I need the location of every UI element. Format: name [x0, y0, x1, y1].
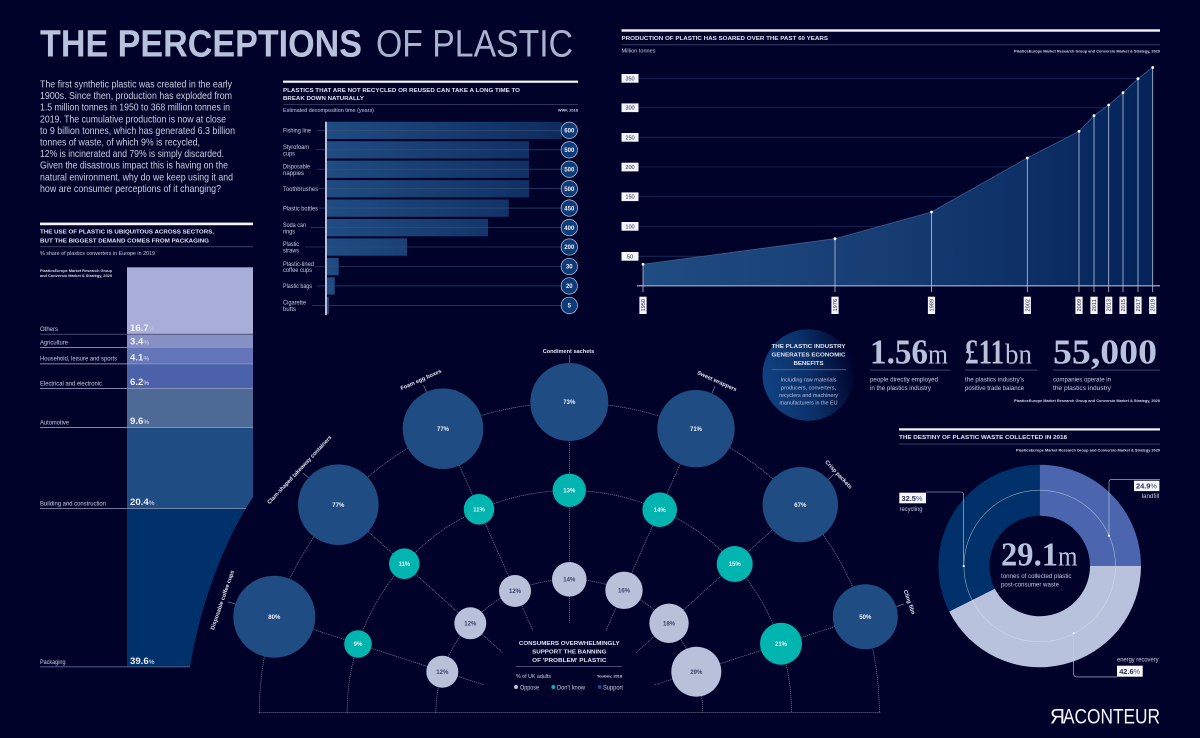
- sector values: 9.6%: [130, 416, 149, 427]
- heading: sectors: [40, 230, 214, 244]
- bubble values: support: [268, 400, 872, 621]
- item labels: coffee cups: [283, 267, 312, 274]
- logo: Raconteur: R: [1050, 705, 1065, 728]
- concentric arcs and spokes: [259, 402, 879, 713]
- stat: companies: [1053, 332, 1160, 392]
- y axis labels: 50: [627, 254, 633, 260]
- item labels: Disposable coffee cups: [210, 570, 236, 631]
- item labels: [210, 349, 916, 631]
- bubble values: don't know: 15%: [729, 562, 741, 568]
- legend: Don't know: [557, 684, 585, 691]
- heading: economic benefits: [772, 344, 846, 367]
- source: economic stats: PlasticsEurope Market Research Group and Conversio Market & Strategy, 2020: [1014, 398, 1160, 403]
- item labels: Soda can: [283, 222, 306, 229]
- stat: companies: companies operate in: [1053, 376, 1111, 384]
- axis: [325, 122, 327, 315]
- bars: [327, 122, 562, 314]
- stat: trade balance: £11: [965, 332, 1004, 372]
- logo: Raconteur: ACONTEUR: [1063, 705, 1160, 728]
- subtitle: consumers: % of UK adults: [516, 674, 551, 680]
- donut centre text: m: [1058, 542, 1078, 572]
- callout: landfill: [1108, 479, 1160, 537]
- donut centre text: post-consumer waste: [1001, 581, 1059, 588]
- legend: Oppose: [520, 684, 539, 691]
- bubble values: oppose: 12%: [464, 622, 477, 628]
- item labels: Plastic-lined: [283, 261, 314, 268]
- callout: recycling: 32.5%: [902, 494, 923, 503]
- item labels: Plastic bags: [283, 283, 312, 290]
- bubble values: oppose: 12%: [509, 589, 522, 595]
- data points: [642, 66, 1154, 266]
- callout: energy recovery: [1073, 632, 1159, 677]
- item labels: Fishing line: [283, 128, 311, 134]
- heading: economic benefits: BENEFITS: [794, 361, 824, 367]
- body: economic benefits: producers, converters,: [781, 385, 837, 391]
- item labels: Plastic bottles: [283, 205, 318, 212]
- item labels: cups: [283, 151, 295, 158]
- heading: economic benefits: THE PLASTIC INDUSTRY: [772, 344, 846, 350]
- item labels: Styrofoam: [283, 144, 309, 151]
- donut centre text: tonnes of collected plastic: [1001, 573, 1072, 580]
- heading: consumers: OF 'PROBLEM' PLASTIC: [532, 658, 607, 664]
- sector values: 3.4%: [130, 336, 149, 348]
- values: 200: [564, 245, 575, 251]
- title: [40, 24, 573, 66]
- stat: companies: the plastics industry: [1053, 385, 1112, 392]
- stacked bar segments: [127, 267, 253, 667]
- area: [643, 68, 1153, 286]
- bubble values: support: 77%: [332, 503, 345, 509]
- item labels: [283, 128, 318, 313]
- stat: trade balance: positive trade balance: [965, 385, 1024, 392]
- y axis labels: [622, 74, 638, 261]
- source: decomposition: WWF, 2018: [558, 108, 579, 113]
- item label ticks: [228, 355, 904, 607]
- bubble values: support: 77%: [437, 427, 450, 433]
- bubble values: don't know: 13%: [563, 488, 576, 494]
- stat: people employed: people directly employed: [870, 376, 938, 384]
- bubble values: oppose: 14%: [563, 578, 576, 584]
- subtitle: sectors: % share of plastics converters in Europe in 2019: [40, 251, 155, 257]
- sector labels: Building and construction: [40, 500, 106, 508]
- item labels: Disposable: [283, 164, 310, 171]
- item labels: butts: [283, 306, 296, 313]
- values: [564, 128, 575, 310]
- legend: Support: [603, 684, 623, 691]
- item labels: Toothbrushes: [283, 186, 318, 193]
- item labels: Cling film: [902, 589, 916, 615]
- source: consumers: YouGov, 2018: [597, 674, 623, 679]
- donut centre text: 29.1: [1001, 536, 1058, 574]
- values: 5: [568, 304, 572, 310]
- area outline: [643, 68, 1153, 264]
- panel: economic benefits circle: [762, 329, 854, 421]
- y axis labels: 350: [625, 76, 635, 82]
- panel: waste destiny donut: [899, 428, 1160, 677]
- panel: production area chart: [622, 29, 1160, 314]
- title: THE PERCEPTIONS: [40, 24, 362, 66]
- sector values: 39.6%: [130, 656, 155, 667]
- stat: people employed: m: [928, 338, 948, 370]
- heading: sectors: THE USE OF PLASTIC IS UBIQUITOUS ACROSS SECTORS,: [40, 230, 214, 236]
- callout: landfill: 24.9%: [1136, 482, 1157, 491]
- intro text: to 9 billion tonnes, which has generated 6.3 billion: [40, 126, 235, 137]
- panel: sectors stacked bar: [40, 223, 253, 667]
- source: sectors: and Conversio Market & Strategy, 2020: [40, 273, 112, 278]
- heading: consumers: [519, 641, 620, 664]
- heading: destiny: THE DESTINY OF PLASTIC WASTE COLLECTED IN 2018: [899, 435, 1068, 441]
- subtitle: production: Million tonnes: [622, 49, 656, 55]
- stat: people employed: in the plastics industry: [870, 385, 932, 392]
- intro text: tonnes of waste, of which 9% is recycled,: [40, 138, 200, 148]
- bubble values: oppose: [436, 578, 703, 676]
- sector values: 16.7%: [130, 323, 155, 334]
- source: production: PlasticsEurope Market Research Group and Conversio Market & Strategy, 2020: [1014, 48, 1160, 53]
- year labels: [639, 297, 1157, 314]
- intro text: [40, 80, 235, 195]
- sector labels: Automotive: [40, 420, 69, 426]
- intro text: 1900s. Since then, production has exploded from: [40, 91, 232, 102]
- panel: consumer support bubble chart: [210, 349, 916, 713]
- callout: recycling: [899, 492, 965, 567]
- base line: [258, 712, 881, 714]
- heading: sectors: BUT THE BIGGEST DEMAND COMES FROM PACKAGING: [40, 238, 209, 244]
- heading: production: PRODUCTION OF PLASTIC HAS SOARED OVER THE PAST 60 YEARS: [622, 36, 828, 42]
- intro text: how are consumer perceptions of it changing?: [40, 184, 221, 195]
- sector values: 6.2%: [130, 377, 149, 388]
- heading: decomposition: PLASTICS THAT ARE NOT RECYCLED OR REUSED CAN TAKE A LONG TIME TO: [283, 88, 520, 94]
- callout: energy recovery: energy recovery: [1117, 656, 1159, 663]
- row guide lines: [305, 130, 561, 305]
- body: economic benefits: manufacturers in the EU: [780, 400, 838, 406]
- heading: decomposition: BREAK DOWN NATURALLY: [283, 96, 364, 102]
- heading: decomposition: [283, 88, 520, 102]
- callout: energy recovery: 42.6%: [1119, 667, 1141, 676]
- donut chart: [938, 465, 1141, 667]
- y axis labels: 150: [625, 195, 635, 201]
- item labels: Crisp packets: [823, 460, 853, 490]
- stat: people employed: [870, 332, 950, 392]
- values: 30: [566, 265, 573, 271]
- stat: trade balance: the plastics industry's: [965, 376, 1025, 384]
- title: OF PLASTIC: [376, 24, 573, 66]
- sector divider lines: [40, 334, 253, 667]
- oppose bubbles: [426, 562, 721, 697]
- sector labels: Agriculture: [40, 340, 68, 346]
- year labels: 2013: [1107, 299, 1113, 312]
- intro text: 12% is incinerated and 79% is simply discarded.: [40, 149, 224, 160]
- sector labels: Electrical and electronic: [40, 380, 103, 388]
- callout: recycling: recycling: [900, 506, 923, 513]
- y axis labels: 250: [625, 135, 635, 141]
- intro text: 2019. The cumulative production is now at close: [40, 114, 226, 125]
- donut centre text: [1001, 536, 1078, 588]
- bubble values: support: 71%: [690, 427, 703, 433]
- year labels: 1989: [930, 299, 936, 312]
- item labels: Clam-shaped takeaway containers: [267, 435, 333, 506]
- values: 500: [564, 148, 575, 154]
- item labels: straws: [283, 248, 299, 255]
- source: sectors: [40, 268, 113, 278]
- year drop lines: [643, 68, 1153, 292]
- year labels: 2002: [1025, 299, 1031, 312]
- sector labels: Packaging: [40, 659, 66, 666]
- item labels: rings: [283, 228, 295, 235]
- source: sectors: PlasticsEurope Market Research Group: [40, 268, 113, 273]
- intro text: The first synthetic plastic was created in the early: [40, 80, 233, 90]
- stat: trade balance: bn: [1005, 338, 1032, 370]
- callout: landfill: landfill: [1142, 493, 1159, 500]
- sector values: 4.1%: [130, 352, 149, 364]
- body: economic benefits: [779, 378, 838, 406]
- bubble values: oppose: 12%: [436, 670, 449, 676]
- sector labels: [40, 326, 117, 666]
- subtitle: decomposition: Estimated decomposition time (years): [283, 108, 374, 114]
- item labels: Sweet wrappers: [696, 370, 737, 393]
- intro text: Given the disastrous impact this is having on the: [40, 161, 228, 172]
- bubble values: don't know: [354, 488, 788, 648]
- body: economic benefits: recyclers and machinery: [779, 393, 838, 399]
- y axis labels: 200: [625, 165, 635, 171]
- sector labels: Others: [40, 326, 58, 333]
- sector values: 20.4%: [130, 497, 155, 508]
- baseline: [637, 285, 1160, 286]
- stat: people employed: 1.56: [870, 332, 928, 372]
- intro text: natural environment, why do we keep using it and: [40, 172, 233, 183]
- bubble values: don't know: 14%: [654, 508, 666, 514]
- stat: companies: 55,000: [1053, 332, 1157, 372]
- sector labels: Household, leisure and sports: [40, 356, 117, 362]
- item labels: nappies: [283, 170, 304, 177]
- source: destiny: PlasticsEurope Market Research Group and Conversio Market & Strategy 2020: [1016, 448, 1160, 453]
- year labels: 2019: [1151, 299, 1157, 312]
- panel: decomposition bar chart: [283, 81, 579, 315]
- support bubbles: [233, 363, 898, 658]
- don't know bubbles: [344, 474, 802, 665]
- bubble values: don't know: 11%: [398, 562, 411, 568]
- bubble values: don't know: 21%: [775, 642, 788, 648]
- y axis labels: 100: [625, 224, 635, 230]
- year labels: 2017: [1136, 299, 1142, 312]
- item labels: Condiment sachets: [543, 349, 594, 355]
- legend: [514, 684, 623, 691]
- heading: economic benefits: GENERATES ECONOMIC: [772, 353, 846, 359]
- values: 500: [564, 167, 575, 173]
- values: 600: [564, 128, 575, 134]
- bubble values: oppose: 16%: [618, 588, 631, 594]
- bubble values: support: 80%: [268, 615, 281, 621]
- heading: consumers: SUPPORT THE BANNING: [532, 649, 607, 655]
- bubble values: don't know: 11%: [473, 508, 485, 514]
- grid lines: [638, 78, 1138, 256]
- bubble values: support: 50%: [859, 615, 872, 621]
- values: 500: [564, 187, 575, 193]
- item labels: Cigarette: [283, 300, 306, 307]
- year labels: 1950: [641, 299, 647, 312]
- year labels: 2011: [1092, 299, 1098, 311]
- values: 20: [566, 284, 573, 290]
- intro text: 1.5 million tonnes in 1950 to 368 million tonnes in: [40, 103, 230, 114]
- stat: trade balance: [965, 332, 1038, 392]
- bubble values: oppose: 29%: [690, 670, 703, 676]
- item labels: Foam egg boxes: [400, 369, 443, 392]
- value circles: [561, 122, 578, 314]
- bubble values: oppose: 18%: [663, 622, 676, 628]
- year labels: 2009: [1077, 299, 1083, 312]
- y axis labels: 300: [625, 106, 635, 112]
- heading: consumers: CONSUMERS OVERWHELMINGLY: [519, 641, 620, 647]
- body: economic benefits: Including raw materials: [780, 378, 837, 384]
- sector values: [130, 323, 155, 667]
- item labels: Plastic: [283, 241, 300, 248]
- bubble values: support: 73%: [563, 400, 576, 406]
- bubble values: support: 67%: [794, 503, 807, 509]
- year labels: 2015: [1121, 299, 1127, 312]
- bubble values: don't know: 9%: [354, 642, 363, 648]
- values: 450: [564, 206, 575, 212]
- year labels: 1976: [833, 299, 839, 312]
- values: 400: [564, 226, 575, 232]
